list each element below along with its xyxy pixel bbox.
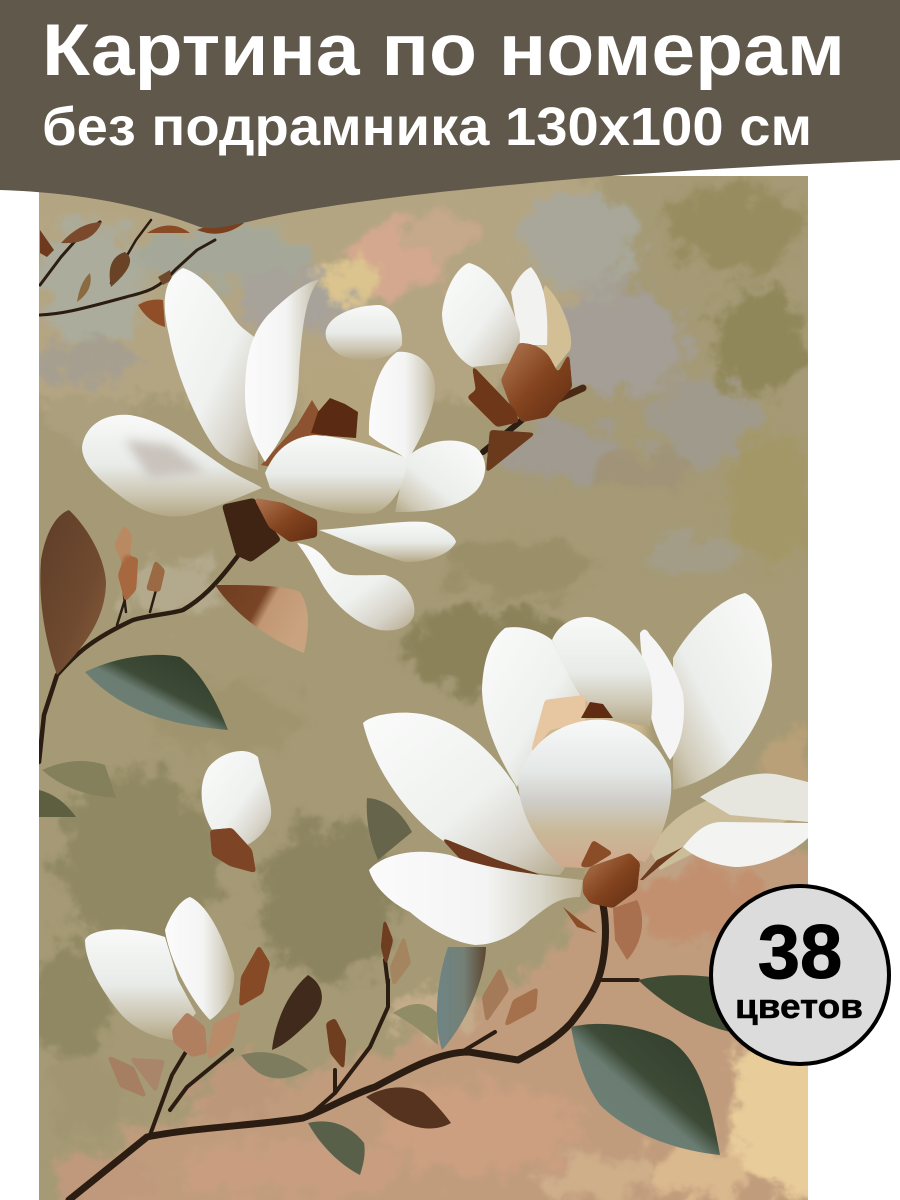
magnolia flower: top bud [442, 263, 572, 473]
branches [39, 220, 638, 1200]
badge: 38 colours: 38 [758, 910, 842, 995]
title: Картина по номерам [42, 10, 845, 91]
painting [20, 170, 850, 1200]
header banner [0, 0, 900, 228]
leaves [39, 222, 730, 1175]
petal shadow: left [125, 440, 205, 478]
badge: 38 colours [711, 886, 889, 1064]
magnolia flower: upper [82, 268, 485, 630]
badge: 38 colours: цветов [735, 988, 863, 1026]
flower throat [530, 695, 585, 755]
magnolia flower: lower-left [85, 897, 270, 1098]
small buds [114, 525, 538, 1070]
subtitle: без подрамника 130х100 см [42, 97, 812, 157]
painting background [20, 170, 850, 1200]
magnolia flower: lower large [363, 593, 808, 960]
magnolia bud: small falling [202, 751, 271, 873]
